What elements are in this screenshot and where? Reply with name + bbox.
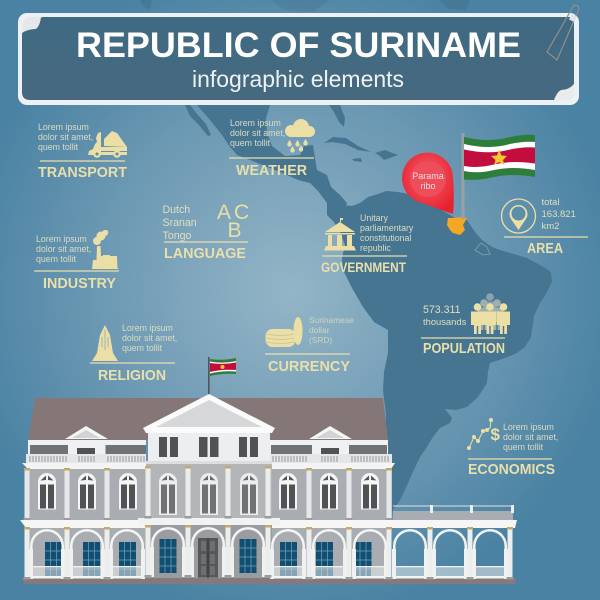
peeled corner top-left bbox=[22, 17, 41, 33]
right gable bbox=[309, 426, 352, 439]
ground floor columns bbox=[24, 525, 514, 580]
section: weather bbox=[229, 118, 315, 179]
government text: constitutional bbox=[360, 233, 411, 243]
area heading: AREA bbox=[527, 241, 563, 257]
Suriname country shape bbox=[447, 217, 467, 235]
big flag bbox=[462, 133, 535, 219]
section: industry bbox=[34, 230, 119, 292]
right terrace rail bbox=[393, 505, 512, 507]
left wing bbox=[20, 440, 146, 578]
religion text: quem tollit bbox=[122, 343, 163, 353]
icon: government building bbox=[324, 218, 356, 250]
weather heading: WEATHER bbox=[236, 163, 307, 179]
area divider bbox=[504, 236, 588, 238]
small flag on building bbox=[208, 357, 236, 395]
terrace posts bbox=[430, 505, 514, 513]
flag star bbox=[491, 150, 507, 165]
transport text: Lorem ipsum bbox=[38, 122, 89, 132]
title banner bbox=[18, 5, 579, 105]
government text: parliamentary bbox=[360, 223, 414, 233]
pin body bbox=[402, 153, 454, 214]
central top windows bbox=[159, 437, 258, 457]
right gable tympanum bbox=[316, 430, 344, 438]
roof bbox=[28, 398, 388, 440]
transport divider bbox=[40, 160, 125, 162]
area text: km2 bbox=[542, 221, 559, 232]
section: transport bbox=[38, 122, 127, 181]
icon: letters ABC: B bbox=[228, 219, 242, 242]
religion heading: RELIGION bbox=[98, 368, 166, 384]
map: Cuba bbox=[324, 137, 371, 152]
central block bbox=[138, 431, 280, 578]
language list: Dutch bbox=[162, 204, 190, 216]
transport heading: TRANSPORT bbox=[38, 165, 127, 181]
transport text: dolor sit amet, bbox=[38, 132, 93, 142]
small flag cloth bbox=[210, 358, 236, 376]
icon: truck bbox=[88, 131, 127, 158]
right wing bbox=[270, 440, 517, 578]
icon: location ring bbox=[502, 199, 536, 233]
industry text: dolor sit amet, bbox=[36, 244, 91, 254]
religion text: dolor sit amet, bbox=[122, 333, 177, 343]
pin label: ribo bbox=[420, 181, 436, 191]
central arched windows bbox=[159, 473, 258, 515]
map: South America bbox=[280, 191, 552, 520]
section: economics bbox=[467, 418, 558, 478]
industry heading: INDUSTRY bbox=[43, 276, 116, 292]
subtitle: infographic elements bbox=[192, 66, 404, 92]
icon: coins bbox=[266, 317, 302, 347]
main door bbox=[198, 538, 218, 578]
government text: republic bbox=[360, 243, 391, 253]
wing arched windows bbox=[38, 473, 379, 510]
area text: 163.821 bbox=[542, 209, 576, 220]
language divider bbox=[164, 241, 248, 243]
icon: people bbox=[471, 293, 510, 334]
currency text: dollar bbox=[309, 325, 330, 335]
small flag star bbox=[220, 365, 224, 369]
population text: 573.311 bbox=[423, 304, 461, 316]
section: religion bbox=[90, 323, 177, 384]
population divider bbox=[421, 337, 505, 339]
small flag pole bbox=[208, 357, 210, 395]
currency text: Surinamese bbox=[309, 315, 354, 325]
map: Hispaniola bbox=[375, 150, 398, 160]
central tympanum bbox=[156, 400, 262, 427]
title: REPUBLIC OF SURINAME bbox=[76, 25, 521, 65]
weather text: dolor sit amet, bbox=[230, 128, 285, 138]
language heading: LANGUAGE bbox=[164, 246, 246, 262]
capital pin bbox=[402, 153, 454, 214]
left gable tympanum bbox=[72, 430, 100, 438]
flag pole bbox=[462, 133, 464, 219]
weather divider bbox=[229, 157, 314, 159]
icon: letters ABC: A bbox=[217, 201, 231, 224]
currency text: (SRD) bbox=[309, 335, 332, 345]
economics heading: ECONOMICS bbox=[468, 462, 555, 478]
economics divider bbox=[468, 458, 552, 460]
map: Amazon mouth outline bbox=[475, 243, 490, 255]
icon: rain cloud bbox=[285, 119, 315, 153]
ground base bbox=[22, 578, 516, 584]
government text: Unitary bbox=[360, 213, 388, 223]
language list: Tongo bbox=[162, 230, 191, 242]
right terrace wall bbox=[393, 511, 513, 520]
section: area bbox=[502, 197, 588, 257]
economics text: dolor sit amet, bbox=[503, 432, 558, 442]
government divider bbox=[322, 255, 407, 257]
weather text: Lorem ipsum bbox=[230, 118, 281, 128]
religion divider bbox=[90, 362, 175, 364]
paper clip bbox=[547, 5, 579, 60]
icon: letters ABC: C bbox=[234, 201, 249, 224]
map: faint northern land bbox=[270, 0, 330, 12]
icon: praying hands bbox=[92, 325, 118, 361]
economics text: Lorem ipsum bbox=[503, 422, 554, 432]
upper columns bbox=[24, 466, 392, 520]
currency heading: CURRENCY bbox=[268, 359, 350, 375]
central pediment bbox=[143, 394, 275, 433]
left balustrade bbox=[30, 456, 144, 462]
area text: total bbox=[542, 197, 559, 208]
pin label: Parama bbox=[412, 171, 444, 181]
clip holder bbox=[569, 14, 577, 22]
map: Americas bbox=[140, 0, 552, 520]
ground floor blue windows bbox=[45, 539, 372, 576]
map: Baja California bbox=[185, 105, 211, 136]
icon: factory bbox=[92, 230, 119, 269]
map: Jamaica bbox=[352, 158, 362, 162]
economics text: quem tollit bbox=[503, 442, 544, 452]
map: northern islands bbox=[140, 0, 470, 10]
section: government bbox=[321, 213, 414, 275]
building bbox=[20, 394, 517, 584]
icon: rising chart with dollar: $ bbox=[490, 425, 500, 444]
section: population bbox=[421, 293, 510, 357]
language list: Sranan bbox=[162, 217, 197, 229]
industry text: Lorem ipsum bbox=[36, 234, 87, 244]
map: Mexico and Central America bbox=[197, 105, 347, 210]
right balustrade bbox=[273, 456, 388, 462]
map: Florida bbox=[329, 105, 345, 127]
section: language bbox=[162, 201, 249, 262]
transport text: quem tollit bbox=[38, 142, 79, 152]
flag cloth bbox=[464, 135, 535, 180]
population heading: POPULATION bbox=[423, 341, 505, 357]
section: currency bbox=[265, 315, 354, 375]
currency divider bbox=[265, 353, 350, 355]
industry divider bbox=[34, 270, 119, 272]
banner frame bbox=[18, 13, 579, 105]
population text: thousands bbox=[423, 316, 467, 327]
left gable bbox=[65, 426, 108, 439]
banner panel bbox=[22, 17, 574, 100]
pin highlight bbox=[410, 161, 446, 197]
religion text: Lorem ipsum bbox=[122, 323, 173, 333]
weather text: quem tollit bbox=[230, 138, 271, 148]
ground floor arches bbox=[29, 527, 508, 579]
industry text: quem tollit bbox=[36, 254, 77, 264]
peeled corner bottom-right bbox=[554, 84, 574, 100]
ground floor balconies bbox=[32, 566, 505, 578]
government heading: GOVERNMENT bbox=[321, 260, 407, 275]
